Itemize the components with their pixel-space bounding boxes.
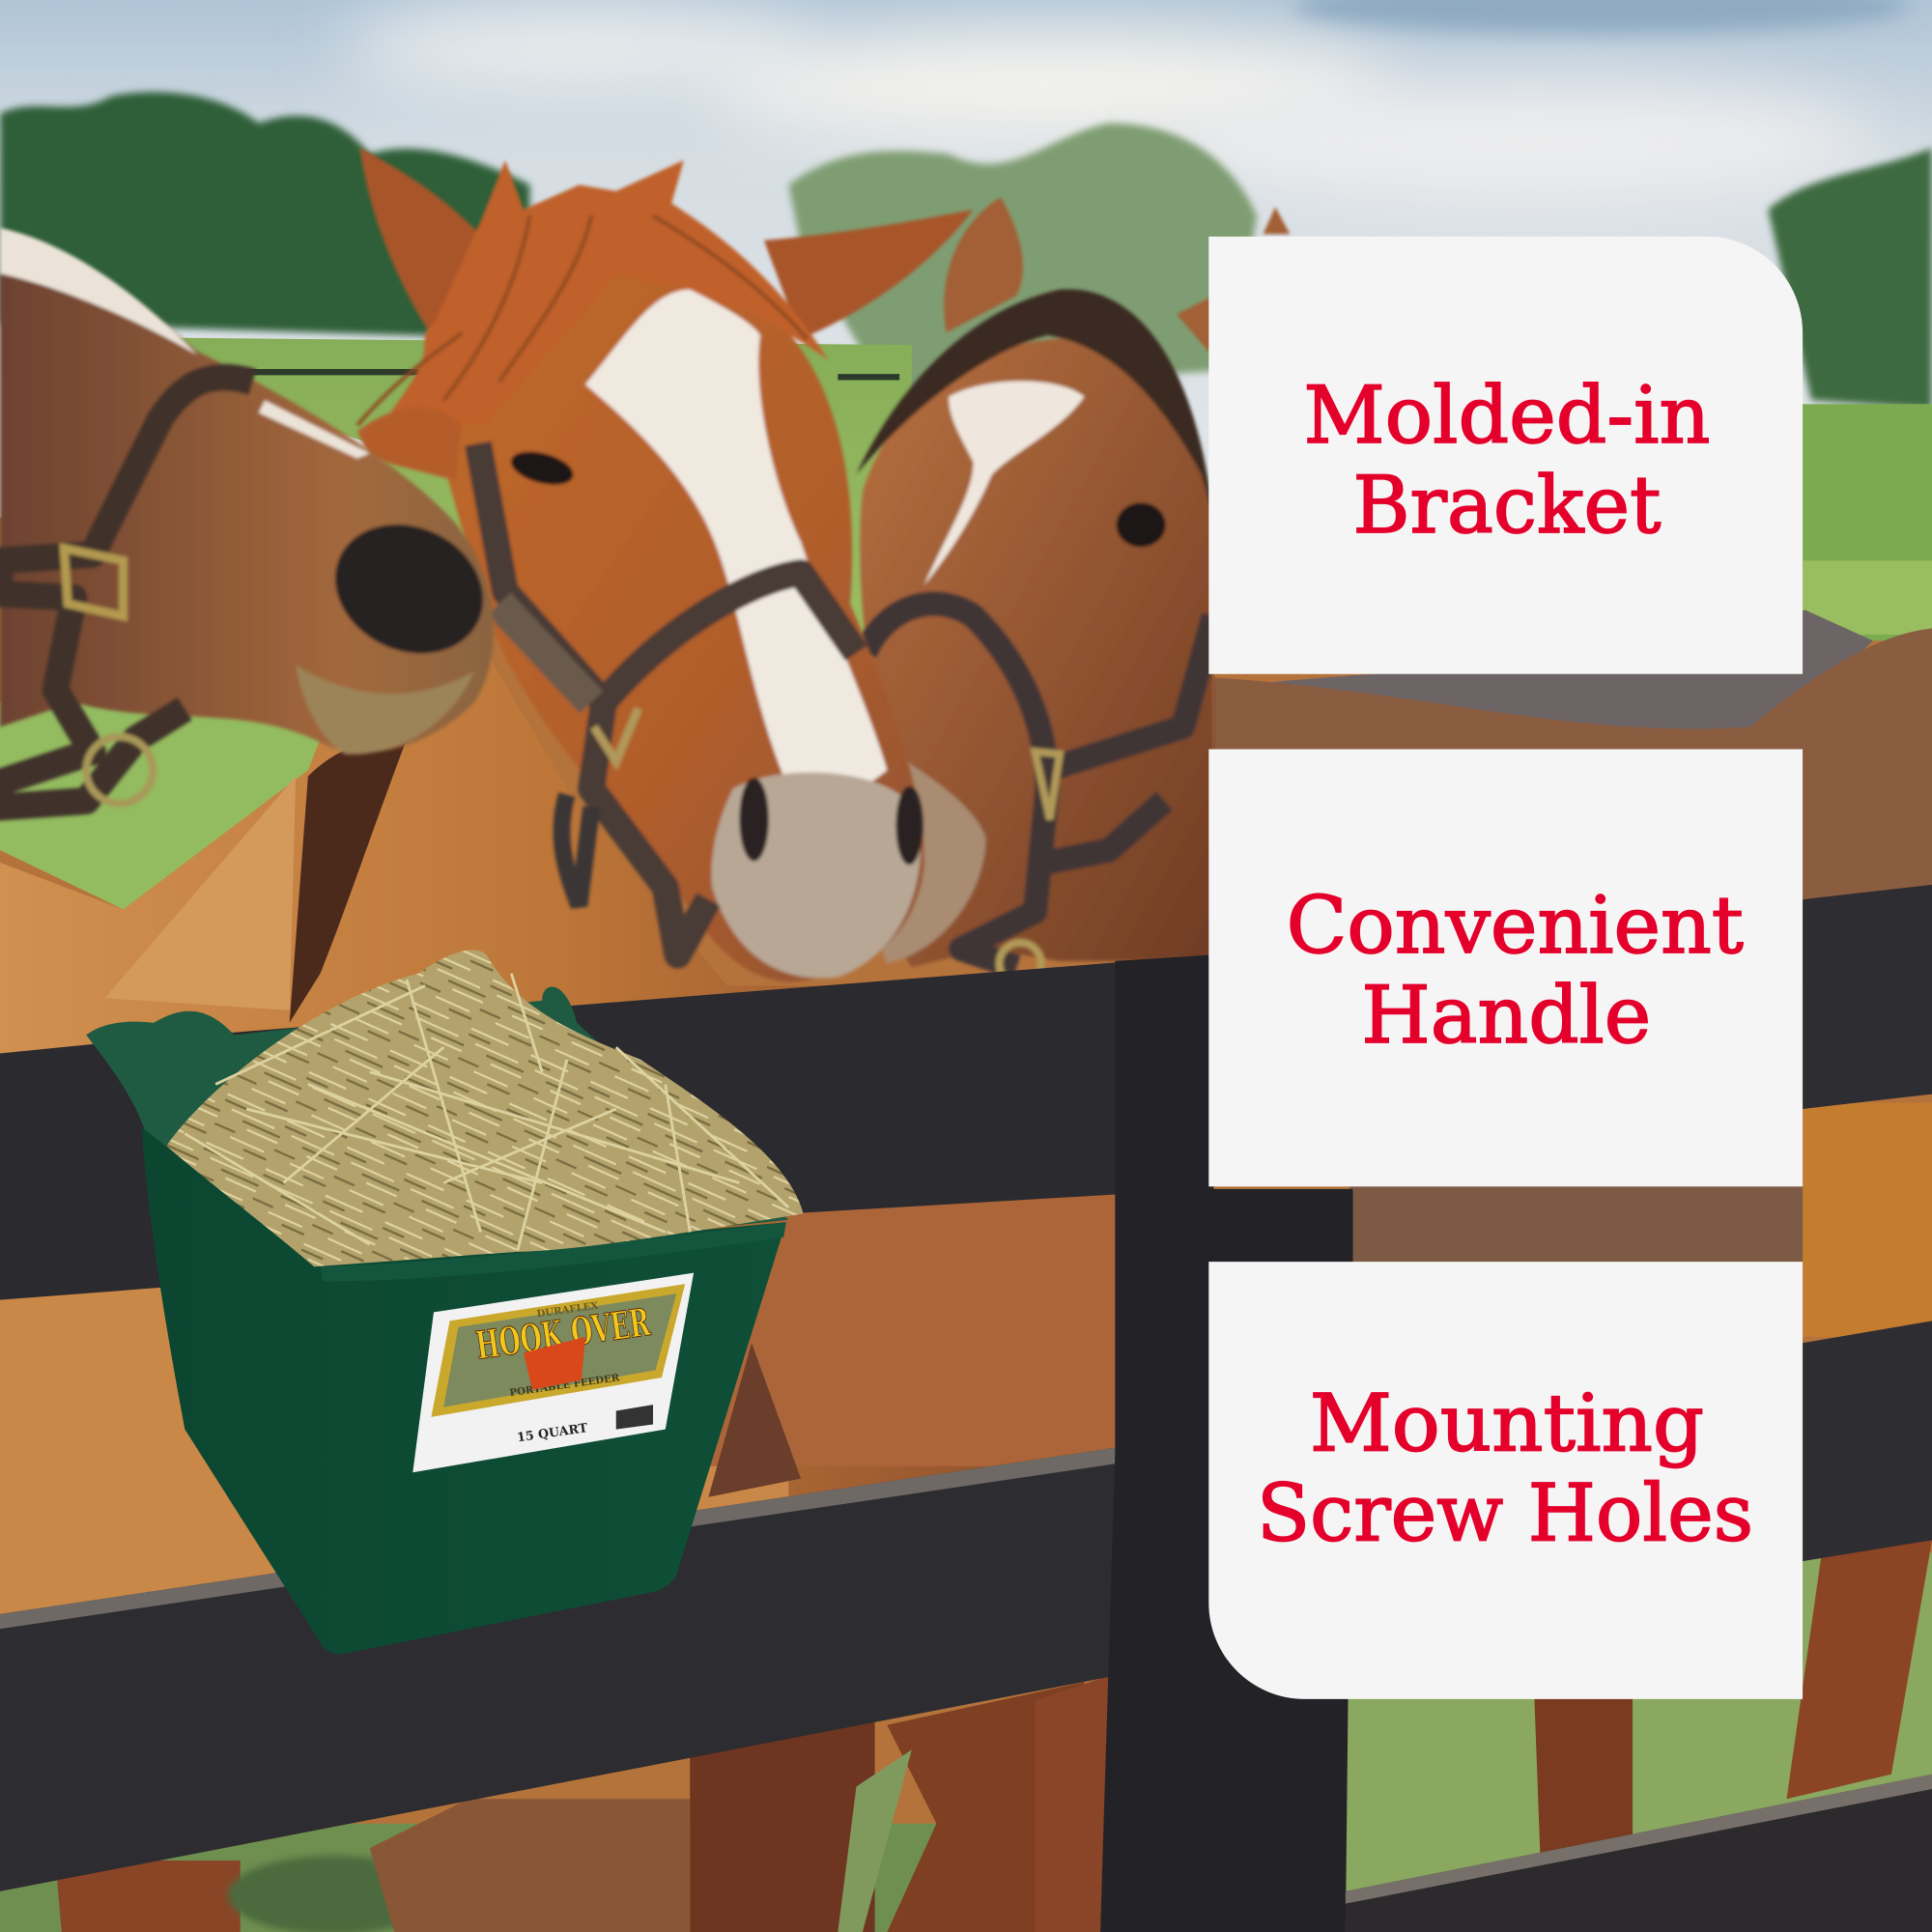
panel text: convenient handle: Convenient bbox=[1287, 880, 1744, 972]
panel: molded-in bracket bbox=[1208, 237, 1803, 674]
feeder label bbox=[412, 1273, 694, 1472]
feeder label orange feeder image bbox=[524, 1337, 585, 1390]
pasture bbox=[0, 337, 1932, 909]
feeder label text bbox=[473, 1300, 653, 1445]
fence top rail bbox=[0, 955, 1208, 1300]
distant tree lines bbox=[0, 92, 1932, 409]
panel text: mounting screw holes: Mounting bbox=[1310, 1378, 1704, 1469]
hay pile bbox=[166, 950, 804, 1266]
feeder label text: DURAFLEX bbox=[536, 1300, 599, 1320]
right horse face and neck bbox=[860, 338, 1213, 967]
hay strands bbox=[185, 974, 788, 1251]
right horse ears bbox=[944, 197, 1290, 357]
left horse white blaze bbox=[0, 228, 370, 458]
middle horse white blaze bbox=[585, 290, 887, 796]
panel text: mounting screw holes: Screw Holes bbox=[1257, 1467, 1753, 1559]
feeder label artwork bbox=[431, 1284, 685, 1417]
fence post bbox=[1100, 955, 1353, 1932]
middle horse eye bbox=[507, 445, 577, 491]
left horse brass ring bbox=[86, 737, 153, 804]
feeder label barcode bbox=[616, 1405, 653, 1430]
middle horse ears bbox=[359, 148, 974, 370]
panel: convenient handle bbox=[1208, 750, 1803, 1186]
legs and ground below the fence bbox=[0, 1540, 1932, 1932]
panel text: molded-in bracket: Bracket bbox=[1353, 460, 1662, 552]
base tone behind the animals bbox=[0, 518, 1932, 1932]
right horse eye bbox=[1117, 502, 1166, 547]
feeder label text: HOOK OVER bbox=[473, 1300, 653, 1369]
panel text: convenient handle: Handle bbox=[1361, 970, 1651, 1062]
right horse white star bbox=[924, 381, 1084, 585]
left horse muzzle bbox=[296, 666, 474, 754]
feeder hook bracket bbox=[86, 987, 788, 1269]
middle horse forelock bbox=[357, 160, 828, 425]
middle horse face bbox=[424, 254, 924, 982]
right bay horse head bbox=[856, 197, 1290, 984]
fence right rails bbox=[1803, 885, 1932, 1561]
photo background: sky and clouds bbox=[0, 0, 1932, 518]
middle horse muzzle bbox=[712, 773, 921, 979]
right horse mane bbox=[856, 289, 1213, 518]
left horse halter bbox=[0, 378, 252, 807]
feeder label text: PORTABLE FEEDER bbox=[509, 1372, 621, 1399]
left horse nostril bbox=[314, 500, 504, 677]
fence lower rail bbox=[0, 1448, 1115, 1891]
middle horse halter bbox=[478, 443, 856, 955]
right horse halter bbox=[865, 604, 1213, 967]
middle chestnut horse head bbox=[357, 148, 974, 982]
chestnut horse body bbox=[0, 518, 1115, 1638]
background horses behind the panels bbox=[1213, 610, 1932, 1337]
left horse head bbox=[0, 228, 504, 807]
wooden fence bbox=[0, 885, 1932, 1932]
feeder product bbox=[86, 950, 804, 1654]
right horse muzzle bbox=[867, 739, 985, 963]
panel: mounting screw holes bbox=[1208, 1262, 1803, 1699]
panel text: molded-in bracket: Molded-in bbox=[1303, 370, 1710, 462]
feeder bucket body bbox=[142, 1127, 786, 1654]
feeder label text: 15 QUART bbox=[516, 1421, 589, 1445]
